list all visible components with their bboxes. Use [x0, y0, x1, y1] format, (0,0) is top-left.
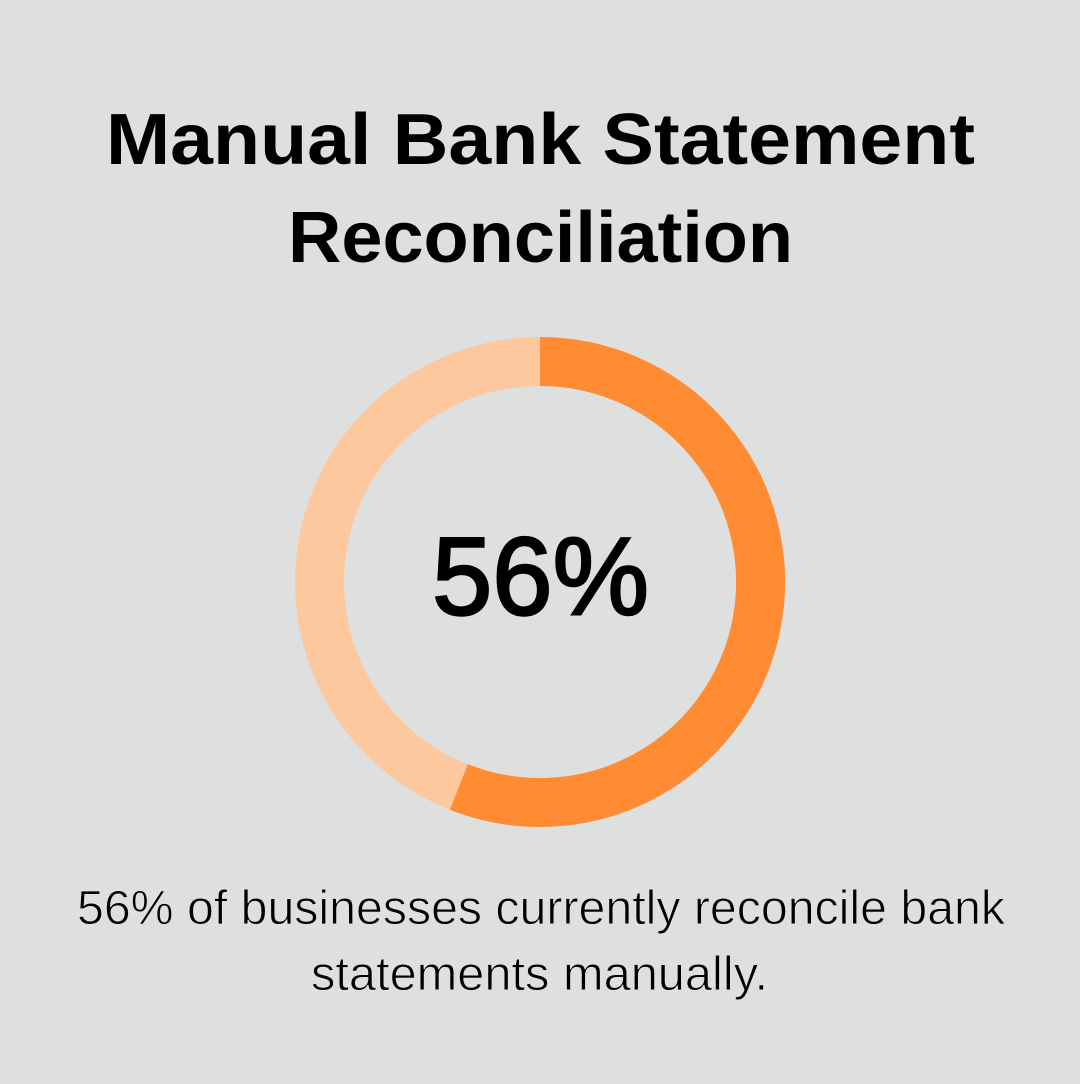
donut center value: 56%: [432, 516, 649, 638]
donut track: remaining 44%: [320, 362, 760, 802]
title: Manual Bank Statement: [106, 100, 975, 180]
caption: [77, 882, 1006, 1001]
donut segment: 56%: [459, 362, 761, 802]
title: Reconciliation: [288, 198, 793, 278]
donut chart: [320, 362, 761, 802]
caption: 56% of businesses currently reconcile bank: [77, 882, 1006, 935]
title: [106, 100, 975, 278]
caption: statements manually.: [311, 948, 768, 1001]
